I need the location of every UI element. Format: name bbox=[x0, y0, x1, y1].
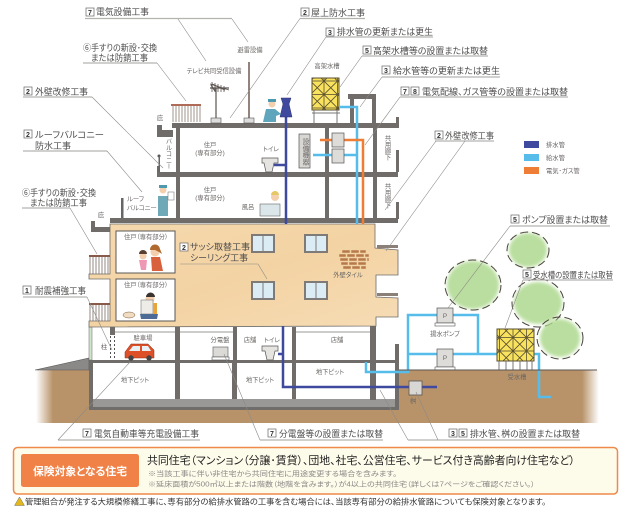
callout: EV charger: 7 bbox=[85, 431, 89, 438]
callout: roof balcony: ルーフバルコニー bbox=[35, 130, 104, 140]
family bbox=[150, 248, 160, 256]
legend bbox=[524, 140, 580, 175]
ramp bbox=[35, 358, 89, 370]
building section bbox=[35, 94, 399, 410]
callout: elevated tank bbox=[340, 45, 488, 87]
lift pump bbox=[437, 308, 453, 323]
callout: distribution board: 分電盤等の設置または取替 bbox=[279, 428, 383, 439]
eligible housing badge: 保険対象となる住宅 bbox=[33, 464, 127, 478]
elevated water tank bbox=[312, 78, 339, 110]
diagram small labels: 庇 bbox=[98, 211, 105, 219]
diagram small labels: トイレ bbox=[264, 337, 280, 344]
callout: pump bbox=[448, 214, 610, 308]
callout: electrical equipment bbox=[85, 6, 248, 61]
windows bbox=[252, 235, 327, 299]
upper roof slab bbox=[172, 123, 399, 128]
diagram small labels: 受水槽 bbox=[508, 372, 527, 381]
balcony worker bbox=[160, 186, 166, 194]
reading man bbox=[146, 294, 154, 304]
water pipe bbox=[313, 107, 357, 224]
basement pit rooms bbox=[93, 363, 395, 399]
callout: wiring and gas bbox=[365, 86, 568, 145]
callout: seismic: 耐震補強工事 bbox=[35, 285, 86, 296]
lower pump bbox=[437, 349, 453, 367]
callout: sash sealing: サッシ取替工事 bbox=[190, 241, 250, 252]
diagram small labels: 庇 bbox=[157, 114, 164, 122]
vent stack bbox=[280, 98, 292, 117]
diagram small labels: 住戸 bbox=[204, 140, 216, 149]
diagram small labels: 共用廊下 bbox=[384, 134, 391, 161]
callout: pump: ポンプ設置または取替 bbox=[522, 214, 608, 225]
car bbox=[125, 344, 154, 358]
callout: handrail lower bbox=[22, 187, 97, 254]
callout: exterior wall left: 外壁改修工事 bbox=[35, 86, 88, 97]
callout: drain and basin: 3 bbox=[451, 431, 455, 438]
callout: sash sealing bbox=[180, 241, 267, 279]
callout: roof balcony: 防水工事 bbox=[35, 140, 71, 151]
note two: ※延床面積が500㎡以上または階数（地階を含みます。）が4以上の共同住宅（詳しくは7ページをご確認ください。） bbox=[148, 480, 535, 488]
callout: pump: 5 bbox=[513, 217, 517, 224]
callout: roof waterproof: 屋上防水工事 bbox=[311, 7, 365, 18]
distribution board bbox=[213, 347, 228, 357]
apartment rooms bbox=[116, 231, 175, 273]
outdoor equipment: P bbox=[443, 355, 447, 362]
upper walls bbox=[176, 128, 180, 218]
tan building block bbox=[89, 224, 398, 327]
callout: exterior wall left: 2 bbox=[26, 89, 30, 96]
diagram small labels: バルコニー bbox=[127, 204, 157, 212]
diagram small labels: 風呂 bbox=[242, 203, 254, 211]
callout: drain and basin: 5 bbox=[461, 431, 465, 438]
callout: handrail roof bbox=[83, 42, 186, 101]
drain pipe bbox=[283, 115, 410, 387]
diagram small labels: 柱 bbox=[101, 342, 108, 351]
callout: handrail lower: または防錆工事 bbox=[30, 197, 87, 208]
catch basin bbox=[409, 381, 422, 395]
bather bbox=[271, 193, 279, 201]
diagram small labels: 分電盤 bbox=[211, 335, 230, 344]
diagram small labels: 避雷設備 bbox=[237, 45, 263, 54]
callout: wiring and gas: 電気配線、ガス管等の設置または取替 bbox=[422, 86, 568, 97]
diagram small labels: 店舗 bbox=[244, 335, 257, 344]
callout: exterior wall left bbox=[23, 86, 163, 168]
roof equipment bbox=[210, 62, 344, 168]
equipment boxes bbox=[299, 134, 310, 168]
dog bbox=[123, 312, 135, 318]
lightning rod bbox=[248, 62, 250, 118]
legend: 排水管 bbox=[546, 140, 566, 149]
callout: wiring and gas: 8 bbox=[413, 89, 417, 96]
callout: water pipe renewal bbox=[360, 65, 500, 107]
callout: drain pipe renewal: 3 bbox=[328, 30, 332, 37]
callout: distribution board: 7 bbox=[270, 431, 274, 438]
workers and residents bbox=[123, 99, 281, 361]
callout: drain pipe renewal: 排水管の更新または更生 bbox=[337, 26, 433, 37]
callout: wiring and gas: 7 bbox=[403, 89, 407, 96]
diagram small labels: 住戸（専有部分） bbox=[124, 280, 168, 289]
callout: seismic bbox=[23, 285, 112, 350]
diagram small labels: 地下ピット bbox=[121, 375, 149, 384]
diagram small labels: 設備機器 bbox=[301, 138, 309, 166]
receiving water tank bbox=[497, 329, 534, 361]
eligible housing badge bbox=[21, 454, 139, 487]
callout: roof balcony bbox=[23, 130, 142, 192]
basement slab bbox=[89, 360, 399, 410]
pipes bbox=[274, 107, 551, 397]
diagram small labels: 揚水ポンプ bbox=[430, 329, 461, 338]
panel: eligible housing bbox=[14, 448, 618, 494]
diagram small labels: ルーフ bbox=[127, 195, 144, 203]
antenna bbox=[210, 84, 229, 120]
diagram small labels: テレビ共同受信設備 bbox=[186, 66, 242, 75]
diagram small labels: (専有部分) bbox=[195, 148, 225, 157]
callout: exterior wall right: 外壁改修工事 bbox=[445, 130, 494, 141]
stair head structure bbox=[348, 94, 376, 123]
callout: seismic: 1 bbox=[25, 288, 29, 295]
callout: receiving tank: 受水槽の設置または取替 bbox=[533, 270, 613, 280]
callout: drain and basin bbox=[380, 390, 580, 440]
callout: water pipe renewal: 給水管等の更新または更生 bbox=[393, 65, 500, 76]
ground floor walls bbox=[89, 327, 92, 360]
callout: water pipe renewal: 3 bbox=[384, 68, 388, 75]
toilet lower bbox=[262, 346, 278, 360]
callout: roof waterproof: 2 bbox=[303, 10, 307, 17]
warning note: 管理組合が発注する大規模修繕工事に、専有部分の給排水管路の工事を含む場合には、当該専有部分の給排水管路についても保険対象となります。 bbox=[25, 496, 546, 506]
diagram small labels: 桝 bbox=[410, 396, 417, 405]
callout: handrail roof: ⑥手すりの新設･交換 bbox=[83, 42, 157, 53]
diagram small labels: 高架水槽 bbox=[314, 61, 340, 70]
diagram small labels: 外壁タイル bbox=[333, 270, 363, 279]
callout: roof balcony: 2 bbox=[26, 132, 30, 139]
diagram small labels: 地下ピット bbox=[316, 367, 344, 376]
outdoor equipment bbox=[399, 308, 597, 395]
note one: ※当該工事に伴い非住宅から共同住宅に用途変更する場合を含みます。 bbox=[148, 469, 397, 478]
diagram small labels: トイレ bbox=[263, 146, 279, 153]
callout: elevated tank: 高架水槽等の設置または取替 bbox=[373, 45, 488, 56]
diagram small labels: 店舗 bbox=[331, 335, 344, 344]
callout: sash sealing: シーリング工事 bbox=[190, 252, 248, 263]
callout: roof waterproof bbox=[230, 7, 365, 118]
trees bbox=[445, 232, 583, 359]
outdoor equipment: P bbox=[443, 313, 447, 320]
callout: exterior wall right bbox=[385, 130, 494, 251]
callout: sash sealing: 2 bbox=[182, 245, 186, 252]
callout: EV charger bbox=[58, 362, 200, 440]
housing types heading: 共同住宅（マンション（分譲･賃貸）、団地、社宅、公営住宅、サービス付き高齢者向け住宅など） bbox=[147, 453, 575, 467]
lower slab bbox=[110, 218, 398, 223]
diagram small labels: 共用廊下 bbox=[384, 182, 391, 209]
callout: drain and basin: 排水管、桝の設置または取替 bbox=[470, 428, 580, 439]
callout: electrical equipment: 7 bbox=[88, 10, 92, 17]
callout: handrail roof: または防錆工事 bbox=[91, 52, 148, 63]
callout: drain pipe renewal bbox=[287, 26, 433, 95]
diagram small labels: バルコニー bbox=[164, 138, 172, 170]
diagram small labels: 住戸（専有部分） bbox=[124, 232, 168, 241]
balcony railings bbox=[90, 257, 108, 321]
legend: 電気･ガス管 bbox=[546, 166, 580, 175]
callout: elevated tank: 5 bbox=[365, 48, 369, 55]
callout: receiving tank bbox=[505, 270, 613, 328]
callout: handrail lower: ⑥手すりの新設･交換 bbox=[22, 187, 96, 198]
middle slab and balcony bbox=[157, 172, 398, 177]
callout: EV charger: 電気自動車等充電設備工事 bbox=[94, 428, 199, 439]
roof worker bbox=[268, 100, 276, 108]
electric gas pipe bbox=[320, 140, 363, 224]
soil ground bbox=[36, 370, 599, 423]
callout: exterior wall right: 2 bbox=[437, 133, 441, 140]
callout: distribution board bbox=[224, 354, 383, 440]
tile patch bbox=[339, 250, 369, 269]
icon: warning triangle bbox=[14, 497, 24, 506]
roof railing bbox=[173, 106, 200, 122]
diagram small labels: 駐車場 bbox=[134, 333, 153, 342]
diagram small labels bbox=[98, 45, 527, 405]
toilet upper bbox=[262, 158, 278, 172]
callout: receiving tank: 5 bbox=[525, 272, 529, 279]
callout: electrical equipment: 電気設備工事 bbox=[96, 6, 149, 17]
legend: 給水管 bbox=[546, 153, 566, 162]
ground line bbox=[399, 369, 597, 371]
diagram small labels: 住戸 bbox=[204, 185, 216, 194]
diagram small labels: 地下ピット bbox=[246, 375, 274, 384]
diagram small labels: (専有部分) bbox=[195, 193, 225, 202]
